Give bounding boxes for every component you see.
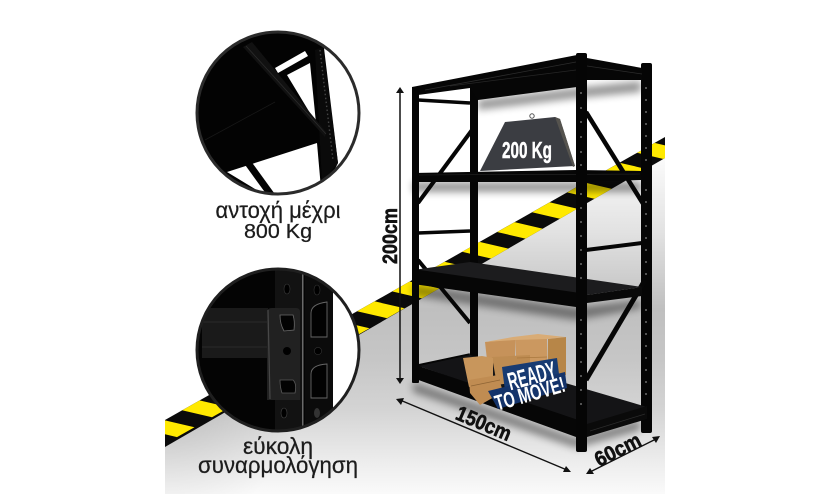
top shelf [412,55,642,100]
ready to move sign [488,356,568,416]
third shelf [413,262,642,308]
shelf shadows [413,81,641,448]
caption: easy assembly: εύκολη [243,433,313,459]
back posts [470,63,652,433]
caption: easy assembly [198,433,358,478]
dimension: 200cm [379,87,404,384]
second shelf [413,170,641,182]
ready to move sign: READY [505,356,559,396]
ready to move sign: TO MOVE! [492,372,568,416]
icon: stacked cardboard boxes [463,334,566,405]
icon: 200 Kg weight: 200 Kg [502,137,552,163]
dimension: 200cm: 200cm [379,208,402,264]
cross braces [418,100,647,380]
bottom shelf [413,355,647,437]
caption: easy assembly: συναρμολόγηση [198,452,358,478]
front posts [412,53,587,452]
caution tape [147,130,684,450]
caption: load capacity: 800 Kg [244,221,312,243]
background floor [165,158,665,494]
post holes [580,87,647,405]
dimension: 150cm: 150cm [452,402,515,446]
detail circle: assembly joint [197,265,373,435]
dimension: 60cm: 60cm [591,429,645,472]
icon: 200 Kg weight [480,114,575,171]
detail circle: load capacity [197,32,370,200]
dimension: 150cm [396,398,571,472]
caption: load capacity: αντοχή μέχρι [216,197,340,223]
shelf unit [412,53,652,452]
caption: load capacity [216,197,340,243]
